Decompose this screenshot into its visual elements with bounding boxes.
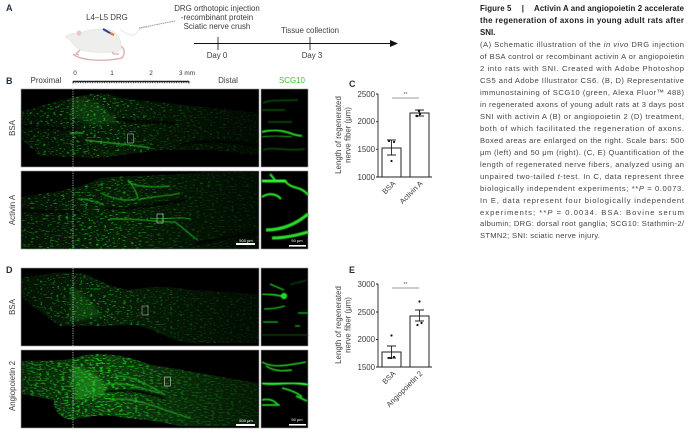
caption heading: SNI. [480, 28, 495, 37]
caption body text: unpaired two-tailed t-test. In C, data represent three [480, 172, 684, 181]
caption body text: both of which facilitated the regeneration of axons. [480, 124, 684, 133]
injection and surgery text: Sciatic nerve crush [184, 22, 250, 31]
bar: BSA [382, 334, 401, 367]
scale ruler 0 to 3 mm: 3 mm [179, 70, 195, 77]
caption body text: In E, data represent four biologically independent [480, 196, 685, 205]
x label: Activin A: Activin A [398, 179, 424, 206]
axis ticks and labels: 1500 [357, 145, 376, 154]
timeline arrow [194, 37, 398, 50]
panel A: experimental schematic [6, 3, 398, 60]
significance bracket: ** [404, 282, 407, 288]
axis ticks and labels: 2000 [357, 335, 376, 344]
axis ticks and labels: 2000 [357, 117, 376, 126]
row label: Activin A: Activin A [8, 194, 17, 225]
panel letter E: E [349, 265, 355, 275]
y-axis title: nerve fiber (μm) [344, 107, 352, 163]
caption body text: immunostaining of SCG10 (green, Alexa Fluor™ 488) [480, 88, 684, 97]
panel E: bar chart angiopoietin 2 [334, 265, 432, 409]
inset: Angiopoietin 2 [261, 350, 308, 428]
scale ruler 0 to 3 mm: 0 [73, 70, 77, 77]
axis ticks and labels [357, 90, 432, 182]
caption body text: in regenerated axons of young adult rats at 3 days post [480, 100, 685, 109]
scale ruler 0 to 3 mm: 1 [110, 70, 114, 77]
bar: Activin A [410, 110, 429, 177]
label: tissue collection: Tissue collection [281, 26, 339, 35]
row label: BSA: BSA [8, 119, 17, 136]
caption heading [480, 4, 685, 37]
inset: BSA [261, 89, 308, 167]
x label: BSA: BSA [380, 179, 397, 196]
caption body text: CS5 and Adobe Illustrator CS6. (B, D) Representative [480, 76, 684, 85]
dashed alignment line [72, 268, 74, 428]
axis ticks and labels: 2500 [357, 308, 376, 317]
caption body text [480, 40, 685, 240]
caption body text: Boxed areas are enlarged on the right. Scale bars: 500 [480, 136, 684, 145]
caption body text: of BSA control or recombinant activin A or angiopoietin [480, 52, 684, 61]
significance bracket [392, 282, 419, 288]
inset: Angiopoietin 2: 50 µm [291, 417, 303, 422]
axis ticks and labels: 3000 [357, 280, 376, 289]
inset: Activin A [261, 171, 308, 249]
panel letter B: B [6, 76, 13, 86]
panel D: angiopoietin 2 micrographs [6, 265, 308, 428]
micrograph: Activin A: 500 µm [239, 238, 253, 243]
caption body text: (A) Schematic illustration of the in vivo DRG injection [480, 40, 684, 49]
label: L4-L5 DRG: L4–L5 DRG [86, 13, 128, 22]
caption heading: the regeneration of axons in young adult rats after [480, 16, 684, 25]
panel C: bar chart activin A [334, 79, 432, 206]
label: proximal: Proximal [31, 76, 62, 85]
significance bracket: ** [404, 92, 407, 98]
micrograph: Activin A [21, 171, 259, 249]
axis ticks and labels: 1500 [357, 363, 376, 372]
caption body text: μm (left) and 50 μm (right). (C, E) Quantification of the [480, 148, 684, 157]
inset: BSA [261, 268, 308, 346]
axis ticks and labels: 1000 [357, 173, 376, 182]
bar: BSA [382, 140, 401, 177]
injection and surgery text: -recombinant protein [181, 13, 253, 22]
caption body text: SNI with activin A (B) or angiopoietin 2 (D) treatment, [480, 112, 684, 121]
inset: Activin A: 50 µm [291, 238, 303, 243]
bar: Angiopoietin 2 [410, 300, 429, 367]
micrograph: Angiopoietin 2: 500 µm [239, 418, 253, 423]
figure caption [480, 4, 685, 240]
panel letter A: A [6, 3, 13, 13]
y-axis title: nerve fiber (μm) [344, 297, 352, 353]
row label: Angiopoietin 2: Angiopoietin 2 [8, 361, 17, 411]
micrograph: BSA [21, 268, 259, 346]
label: day 3: Day 3 [302, 51, 323, 60]
dashed alignment line [72, 84, 74, 249]
label: SCG10: SCG10 [279, 76, 306, 85]
micrograph: BSA [21, 89, 259, 167]
scale ruler 0 to 3 mm [73, 70, 195, 84]
caption body text: length of regenerated nerve fibers, analyzed using an [480, 160, 684, 169]
row label: BSA: BSA [8, 298, 17, 315]
y-axis title: Length of regenerated [334, 96, 343, 174]
caption body text: biologically independent experiments; **P = 0.0073. [480, 184, 684, 193]
axis ticks and labels: 2500 [357, 90, 376, 99]
panel letter D: D [6, 265, 13, 275]
caption body text: 2 into rats with SNI. Created with Adobe Photoshop [480, 64, 684, 73]
injection and surgery text: DRG orthotopic injection [174, 4, 260, 13]
label: distal: Distal [218, 76, 238, 85]
panel letter C: C [349, 79, 356, 89]
scale ruler 0 to 3 mm: 2 [149, 70, 153, 77]
x label: Angiopoietin 2: Angiopoietin 2 [384, 369, 424, 409]
caption body text: experiments; **P = 0.0034. BSA: Bovine serum [480, 208, 684, 217]
label: day 0: Day 0 [207, 51, 228, 60]
caption heading: Figure 5 | Activin A and angiopoietin 2 accelerate [480, 4, 685, 13]
y-axis title: Length of regenerated [334, 286, 343, 364]
micrograph: Angiopoietin 2 [21, 350, 259, 428]
x label: BSA: BSA [380, 369, 397, 386]
panel B: activin A micrographs [6, 70, 308, 249]
caption body text: albumin; DRG: dorsal root ganglia; SCG10: Stathmin-2/ [480, 219, 685, 228]
caption body text: STMN2; SNI: sciatic nerve injury. [480, 231, 600, 240]
icon: rat with injection [65, 21, 175, 60]
axis ticks and labels [357, 280, 432, 372]
